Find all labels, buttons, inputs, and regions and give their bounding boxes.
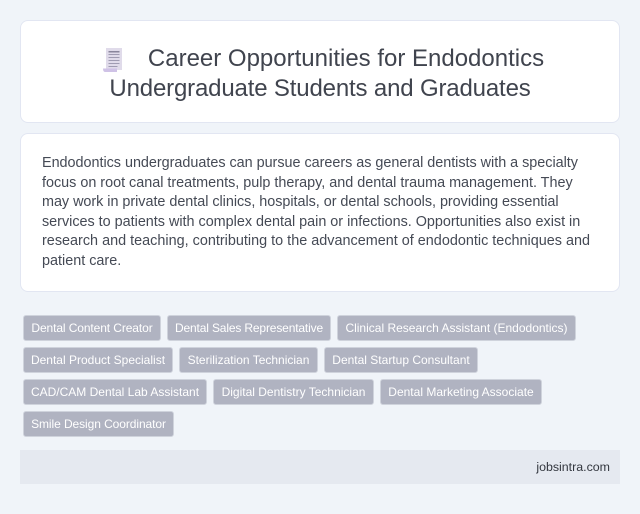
footer source text: jobsintra.com — [536, 460, 610, 474]
career tags: Digital Dentistry Technician — [222, 385, 365, 399]
title: Undergraduate Students and Graduates — [109, 75, 531, 102]
description text: may work in private dental clinics, hospitals, or dental schools, providing essential — [42, 194, 559, 210]
description text: Endodontics undergraduates can pursue careers as general dentists with a specialty — [42, 155, 578, 171]
description panel — [20, 133, 620, 292]
description text: focus on root canal treatments, pulp therapy, and dental trauma management. They — [42, 175, 573, 191]
career tags: Dental Sales Representative — [175, 321, 323, 335]
career tags: CAD/CAM Dental Lab Assistant — [31, 385, 199, 399]
career tags: Sterilization Technician — [188, 353, 309, 367]
career tags: Smile Design Coordinator — [31, 417, 166, 431]
career tags: Dental Marketing Associate — [388, 385, 534, 399]
description text: services to patients with complex dental pain or infections. Opportunities also exist in — [42, 214, 580, 230]
career tags: Clinical Research Assistant (Endodontics) — [345, 321, 568, 335]
description text — [42, 155, 590, 269]
description text: patient care. — [42, 253, 121, 269]
title: Career Opportunities for Endodontics — [148, 45, 544, 72]
footer bar — [20, 450, 620, 484]
description text: research and teaching, contributing to the advancement of endodontic techniques and — [42, 233, 590, 249]
career tags: Dental Startup Consultant — [332, 353, 470, 367]
title — [109, 45, 544, 102]
career tags: Dental Product Specialist — [31, 353, 165, 367]
icon: scroll document — [103, 48, 122, 72]
career tags — [23, 315, 576, 437]
career tags: Dental Content Creator — [31, 321, 153, 335]
header panel — [20, 20, 620, 123]
